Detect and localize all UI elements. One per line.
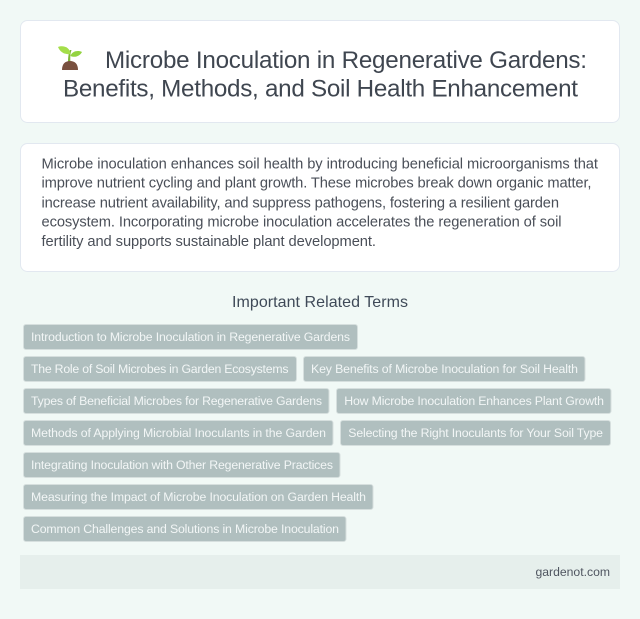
introduction paragraph: increase nutrient availability, and suppress pathogens, fostering a resilient garden xyxy=(42,195,559,211)
footer: gardenot.com xyxy=(536,565,610,579)
title text: Benefits, Methods, and Soil Health Enhancement xyxy=(63,76,578,102)
tag: Introduction to Microbe Inoculation in Regenerative Gardens xyxy=(31,330,350,344)
introduction paragraph: Microbe inoculation enhances soil health by introducing beneficial microorganisms that xyxy=(42,156,598,172)
introduction paragraph: improve nutrient cycling and plant growth. These microbes break down organic matter, xyxy=(42,176,592,192)
tag: Methods of Applying Microbial Inoculants in the Garden xyxy=(31,426,326,440)
title text: Microbe Inoculation in Regenerative Gardens: xyxy=(105,47,587,74)
tag xyxy=(336,388,611,414)
tag xyxy=(24,452,340,478)
footer xyxy=(20,555,620,589)
tag: Key Benefits of Microbe Inoculation for Soil Health xyxy=(311,362,578,376)
tag xyxy=(340,420,610,446)
tag: The Role of Soil Microbes in Garden Ecosystems xyxy=(31,362,288,376)
tag: Common Challenges and Solutions in Microbe Inoculation xyxy=(31,522,339,536)
introduction paragraph xyxy=(42,156,598,250)
tag xyxy=(24,420,333,446)
tag: Integrating Inoculation with Other Regenerative Practices xyxy=(31,458,333,472)
tag: Types of Beneficial Microbes for Regenerative Gardens xyxy=(31,394,322,408)
tag: Measuring the Impact of Microbe Inoculation on Garden Health xyxy=(31,490,366,504)
panel: related term tags xyxy=(24,324,611,542)
panel: title card xyxy=(20,20,620,122)
tag xyxy=(24,484,373,510)
title text xyxy=(63,47,587,102)
panel: introduction xyxy=(20,144,620,272)
heading: important related terms: Important Related Terms xyxy=(232,294,408,311)
tag xyxy=(24,324,358,350)
tag: Selecting the Right Inoculants for Your Soil Type xyxy=(348,426,603,440)
tag xyxy=(304,356,585,382)
icon: seedling xyxy=(58,46,82,70)
tag xyxy=(24,516,346,542)
introduction paragraph: ecosystem. Incorporating microbe inoculation accelerates the regeneration of soil xyxy=(42,215,562,231)
introduction paragraph: fertility and supports sustainable plant development. xyxy=(42,234,376,250)
tag xyxy=(24,356,296,382)
tag xyxy=(24,388,329,414)
tag: How Microbe Inoculation Enhances Plant Growth xyxy=(344,394,604,408)
